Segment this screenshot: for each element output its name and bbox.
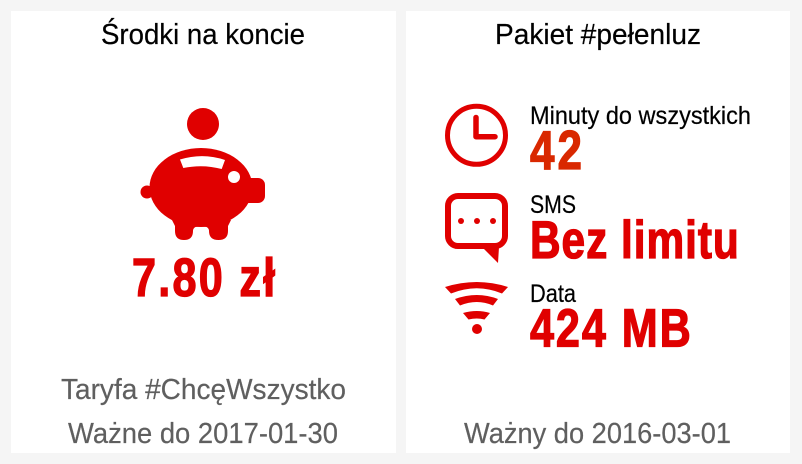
package validity date: Ważny do 2016-03-01	[464, 418, 731, 450]
SMS value: Bez limitu	[530, 212, 739, 270]
heading: account balance: Środki na koncie	[101, 17, 305, 51]
icon: clock	[448, 106, 506, 164]
minutes label: Minuty do wszystkich	[530, 102, 751, 130]
tariff name: Taryfa #ChcęWszystko	[61, 374, 346, 406]
panel: account balance	[11, 11, 396, 453]
minutes value: 42	[530, 119, 582, 181]
icon: speech bubble	[448, 196, 505, 263]
heading: package: Pakiet #pełenluz	[495, 19, 701, 51]
data label: Data	[530, 280, 576, 308]
icon: piggy bank	[140, 108, 265, 240]
balance validity date: Ważne do 2017-01-30	[68, 418, 338, 450]
SMS label: SMS	[530, 191, 576, 219]
data value: 424 MB	[530, 299, 691, 359]
balance amount: 7.80 zł	[132, 249, 276, 308]
panel: package	[406, 11, 790, 453]
icon: wifi signal	[445, 282, 508, 334]
